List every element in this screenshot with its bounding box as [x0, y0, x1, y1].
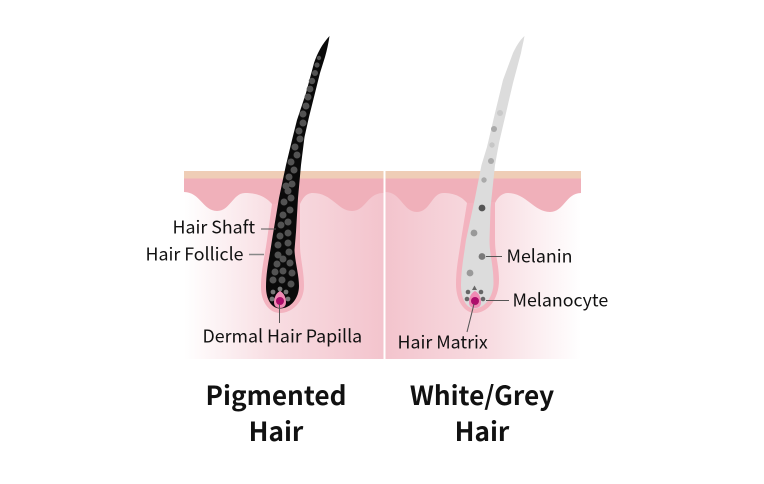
dermal papilla [274, 291, 286, 308]
epidermis wave [386, 178, 581, 212]
skin surface layer [386, 171, 581, 178]
follicle [456, 202, 499, 313]
panel: pigmented hair skin cross-section [184, 36, 384, 359]
label: Hair Matrix: Hair Matrix [398, 329, 488, 355]
melanocytes [465, 286, 485, 301]
label: Dermal Hair Papilla: Dermal Hair Papilla [202, 323, 362, 349]
epidermis wave [184, 178, 384, 211]
heading: White/Grey Hair: White/Grey [410, 375, 554, 413]
melanin granules [270, 56, 321, 301]
melanin granules [467, 110, 503, 276]
label: Melanocyte: Melanocyte [512, 287, 608, 313]
follicle [261, 202, 304, 313]
leader lines [249, 229, 509, 332]
heading: Pigmented Hair: Hair [249, 411, 304, 449]
skin surface layer [184, 171, 384, 178]
heading: Pigmented Hair: Pigmented [206, 375, 346, 413]
hair shaft: black [266, 36, 330, 308]
label: Hair Shaft: Hair Shaft [172, 214, 255, 240]
label: Hair Follicle: Hair Follicle [146, 241, 244, 267]
hair matrix [469, 291, 481, 308]
label: Melanin: Melanin [506, 243, 572, 269]
panel: white/grey hair skin cross-section [386, 36, 581, 359]
hair shaft: white/grey [461, 36, 524, 308]
heading: White/Grey Hair: Hair [455, 411, 510, 449]
